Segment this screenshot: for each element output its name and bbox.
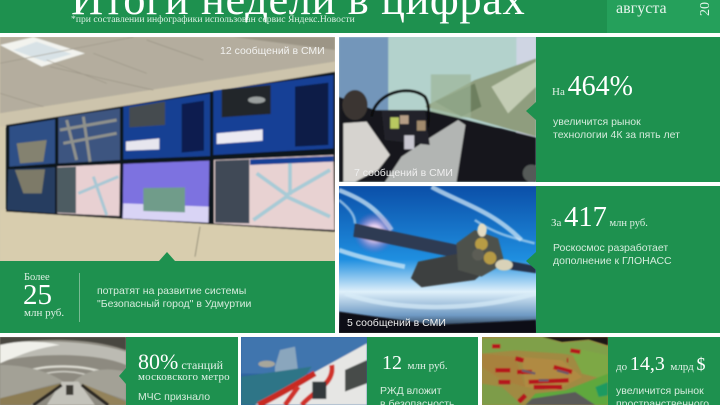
value: На 464%	[552, 71, 633, 102]
label: Более: Более	[24, 272, 50, 283]
media count: 12 сообщений в СМИ	[220, 45, 325, 57]
panel: GLONASS	[339, 186, 720, 333]
description	[553, 242, 672, 267]
panel: railways	[241, 337, 478, 405]
description: дополнение к ГЛОНАСС	[553, 255, 672, 267]
pointer	[119, 368, 126, 384]
divider	[78, 273, 80, 322]
value: 12 млн руб.	[382, 352, 448, 374]
date year: 20	[698, 2, 713, 16]
description: Роскосмос разработает	[553, 242, 668, 254]
description: технологии 4К за пять лет	[553, 129, 680, 141]
stat box	[608, 337, 720, 405]
media count: 7 сообщений в СМИ	[354, 167, 453, 179]
photo: terrain map	[482, 337, 608, 405]
description	[553, 116, 680, 141]
pointer	[526, 102, 536, 120]
photo: train	[241, 337, 367, 405]
photo: satellite	[339, 186, 536, 333]
header band	[0, 0, 720, 33]
panel: safe city	[0, 37, 335, 333]
panel: metro	[0, 337, 238, 405]
value: 80% станций	[138, 349, 223, 374]
stat box	[0, 261, 335, 333]
photo: metro station	[0, 337, 126, 405]
pointer	[526, 252, 536, 270]
value: до 14,3 млрд $	[616, 353, 706, 375]
subtitle note: *при составлении инфографики использован сервис Яндекс.Новости	[71, 14, 355, 24]
description: увеличится рынок	[616, 385, 704, 397]
description: РЖД вложит	[380, 385, 442, 397]
media count: 5 сообщений в СМИ	[347, 317, 446, 329]
description	[97, 285, 251, 310]
value: За 417 млн руб.	[551, 202, 648, 233]
unit: млн руб.	[24, 307, 64, 319]
description: МЧС признало	[138, 391, 210, 403]
description: увеличится рынок	[553, 116, 641, 128]
stat box	[536, 186, 720, 333]
value caption: московского метро	[138, 371, 230, 383]
stat box	[367, 337, 478, 405]
description: потратят на развитие системы	[97, 285, 246, 297]
stat box	[536, 37, 720, 182]
photo: video wall	[0, 37, 335, 261]
stat box	[126, 337, 238, 405]
panel: 4K technology	[339, 37, 720, 182]
date month: августа	[616, 0, 667, 17]
value: 25: 25	[23, 279, 52, 311]
photo: flight simulator	[339, 37, 536, 182]
description	[616, 385, 709, 405]
panel: geospatial market	[482, 337, 720, 405]
description	[380, 385, 454, 405]
description: "Безопасный город" в Удмуртии	[97, 298, 251, 310]
date block	[607, 0, 720, 33]
triangle pointer	[159, 252, 175, 261]
